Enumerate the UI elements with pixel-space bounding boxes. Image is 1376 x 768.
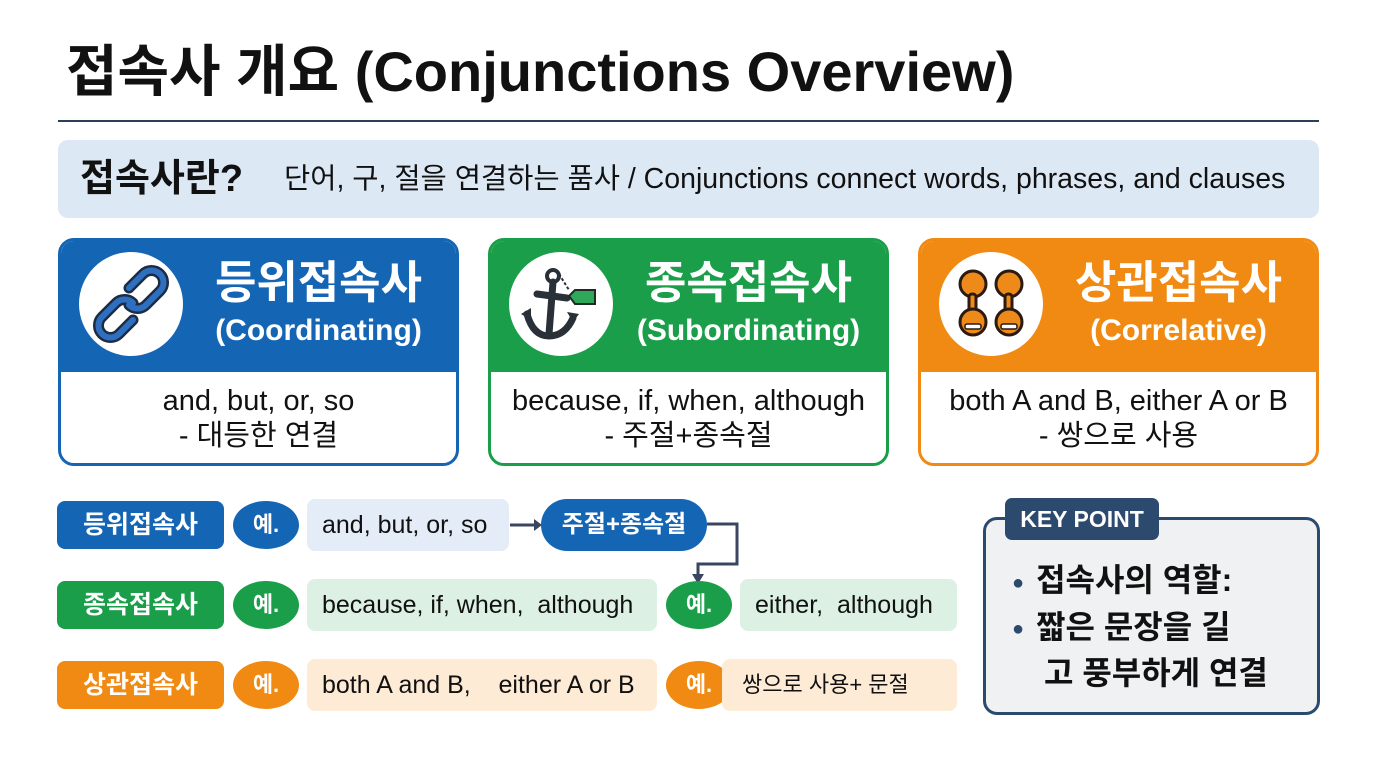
key point tag: KEY POINT <box>1020 506 1144 532</box>
row 2 example circle: 예. <box>253 592 279 617</box>
key point text: 고 풍부하게 연결 <box>1044 655 1268 691</box>
pill: main+sub clause: 주절+종속절 <box>562 511 686 538</box>
definition box <box>58 140 1319 218</box>
row 1 label <box>57 501 224 549</box>
key point text: ● 접속사의 역할: <box>1012 562 1232 598</box>
row 3 example circle <box>233 661 299 709</box>
row 1 text box <box>307 499 509 551</box>
card: subordinating: 종속접속사 <box>645 257 852 308</box>
row 3 second example circle: 예. <box>686 672 712 697</box>
card: correlative: - 쌍으로 사용 <box>1039 420 1198 452</box>
row 3 second text box: 쌍으로 사용+ 문절 <box>742 672 909 697</box>
card: correlative: 상관접속사 <box>1075 257 1282 308</box>
row 2 text box: because, if, when, although <box>322 591 633 619</box>
row 2 second text box <box>740 579 957 631</box>
row 2 example circle <box>233 581 299 629</box>
row 2 label: 종속접속사 <box>83 591 198 619</box>
row 3 text box: both A and B, either A or B <box>322 671 635 699</box>
row 2 text box <box>307 579 657 631</box>
key point text: ● 짧은 문장을 길 <box>1012 609 1231 645</box>
card: coordinating: and, but, or, so <box>163 385 354 417</box>
row 3 label <box>57 661 224 709</box>
definition heading: 접속사란? <box>80 158 243 200</box>
row 1 text box: and, but, or, so <box>322 511 487 539</box>
row 1 example circle: 예. <box>253 512 279 537</box>
pill: main+sub clause <box>541 499 707 551</box>
card: subordinating: (Subordinating) <box>637 314 860 347</box>
arrow: to main clause <box>510 519 541 531</box>
row 3 example circle: 예. <box>253 672 279 697</box>
row 3 label: 상관접속사 <box>83 671 198 699</box>
card: coordinating: (Coordinating) <box>215 314 422 347</box>
icon: cufflinks <box>939 252 1043 356</box>
card: correlative: both A and B, either A or B <box>949 385 1288 417</box>
card: subordinating: - 주절+종속절 <box>604 420 773 452</box>
card: coordinating: - 대등한 연결 <box>179 420 338 452</box>
title: 접속사 개요 (Conjunctions Overview) <box>66 40 1014 103</box>
arrow: connector down <box>692 522 738 582</box>
row 2 second example circle <box>666 581 732 629</box>
key point tag <box>1005 498 1159 540</box>
icon: anchor <box>509 252 613 356</box>
card: subordinating: because, if, when, although <box>512 385 865 417</box>
row 3 second example circle <box>666 661 732 709</box>
card: subordinating <box>488 238 889 466</box>
icon: chain link <box>79 252 183 356</box>
card: coordinating: 등위접속사 <box>215 257 422 308</box>
row 2 second text box: either, although <box>755 591 933 619</box>
definition text: 단어, 구, 절을 연결하는 품사 / Conjunctions connect words, phrases, and clauses <box>284 163 1285 195</box>
row 1 example circle <box>233 501 299 549</box>
key point panel <box>983 517 1320 715</box>
row 3 text box <box>307 659 657 711</box>
row 2 label <box>57 581 224 629</box>
card: correlative <box>918 238 1319 466</box>
row 1 label: 등위접속사 <box>83 511 198 539</box>
key point text <box>1012 562 1268 691</box>
row 2 second example circle: 예. <box>686 592 712 617</box>
card: correlative: (Correlative) <box>1090 314 1267 347</box>
card: coordinating <box>58 238 459 466</box>
row 3 second text box <box>722 659 957 711</box>
